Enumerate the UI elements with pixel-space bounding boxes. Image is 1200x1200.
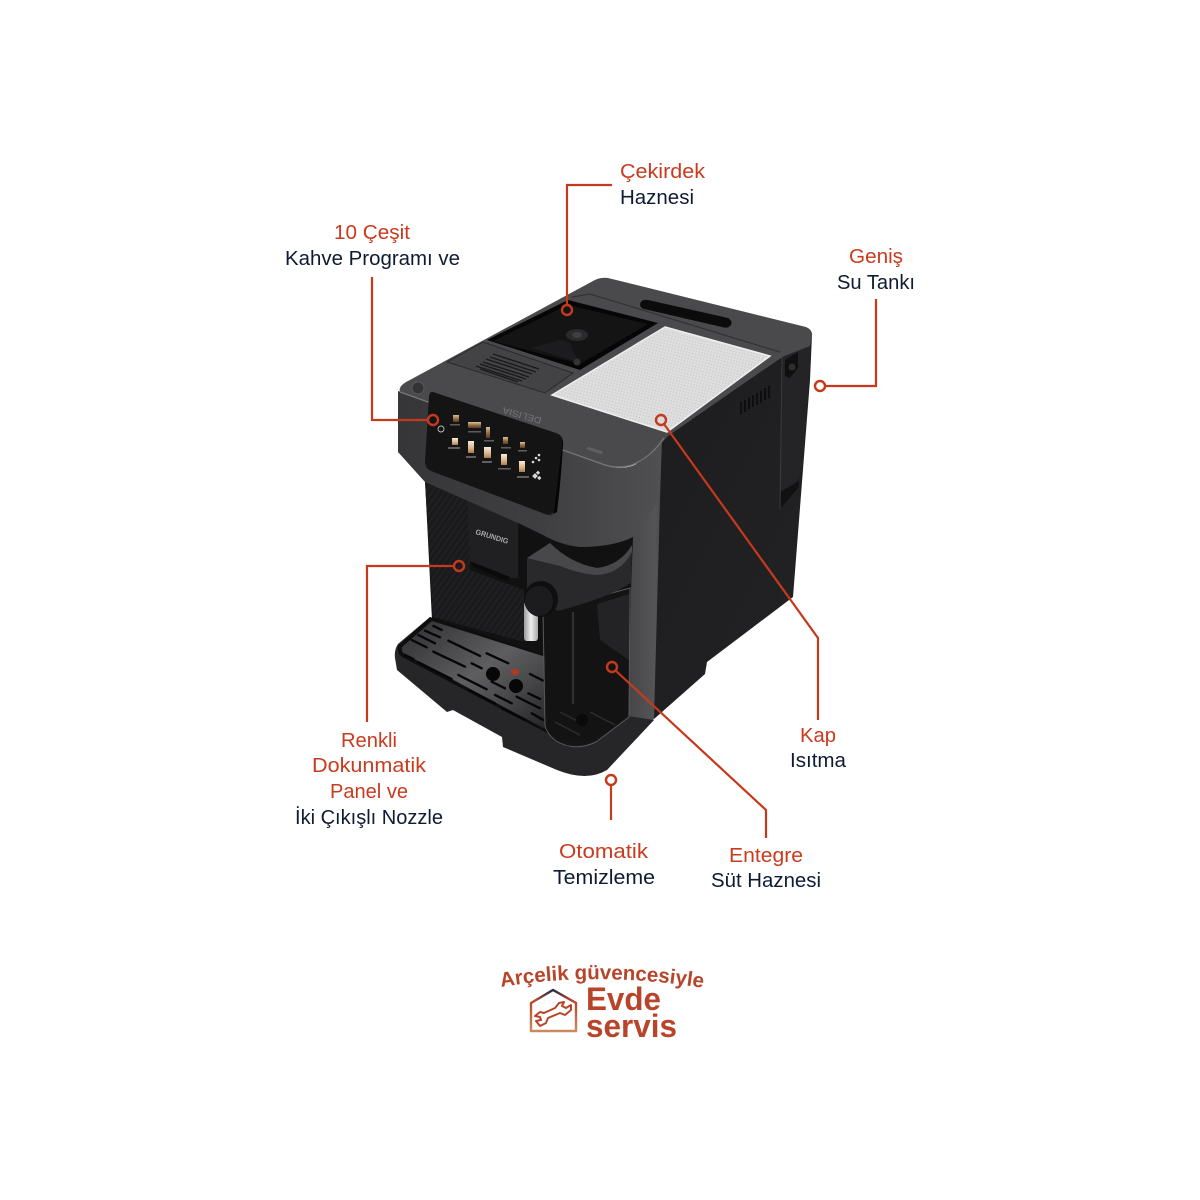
handle slot xyxy=(640,300,732,328)
label: touch panel and nozzle: İki Çıkışlı Nozzle xyxy=(295,806,443,829)
jug glass xyxy=(543,588,630,747)
jug head xyxy=(527,543,632,611)
water tank xyxy=(780,338,811,509)
badge title: servis xyxy=(586,1008,677,1044)
drain holes xyxy=(486,667,500,681)
label: water tank: Geniş xyxy=(849,246,903,268)
label: cup warming: Isıtma xyxy=(790,750,847,772)
brand name: DELISIA xyxy=(501,405,543,426)
label: milk container: Süt Haznesi xyxy=(711,870,821,892)
grate slots xyxy=(405,626,543,720)
GRUNDIG logo: GRUNDIG xyxy=(474,527,510,546)
callout: milk container xyxy=(607,662,821,892)
label: automatic cleaning: Temizleme xyxy=(553,867,655,889)
drink row 2 xyxy=(452,438,525,472)
machine side panel xyxy=(630,335,812,720)
label: water tank: Su Tankı xyxy=(837,272,915,294)
icon: house with wrench xyxy=(531,990,576,1031)
right front column xyxy=(628,440,662,745)
label: milk container: Entegre xyxy=(729,845,803,867)
top rear seam xyxy=(572,294,780,352)
grille lid xyxy=(447,342,573,393)
jug knob xyxy=(524,581,558,617)
coffee nozzle housing xyxy=(467,498,518,581)
label: coffee programs: Kahve Programı ve xyxy=(285,248,460,270)
power button xyxy=(412,382,424,394)
carbon textured wall xyxy=(425,482,524,642)
settings icons xyxy=(532,454,541,480)
badge arched heading: Arçelik güvencesiyle xyxy=(502,965,704,988)
label: coffee programs: 10 Çeşit xyxy=(334,222,410,244)
touch screen xyxy=(425,392,563,516)
callout: automatic cleaning xyxy=(553,775,655,889)
coffee machine xyxy=(395,278,812,776)
milk spout xyxy=(524,601,538,641)
bean hopper xyxy=(487,300,658,370)
label: touch panel and nozzle: Panel ve xyxy=(330,781,408,803)
label: bean hopper: Haznesi xyxy=(620,187,694,209)
top front highlight edge xyxy=(400,392,664,467)
callout: cup warming xyxy=(656,415,847,772)
tray grate xyxy=(402,621,546,729)
drink row 1 xyxy=(453,415,525,448)
panel icon xyxy=(438,426,444,432)
jug slots through glass xyxy=(555,712,615,735)
drip tray xyxy=(395,617,654,776)
label: bean hopper: Çekirdek xyxy=(620,161,706,183)
white perforated mat xyxy=(552,327,770,432)
side vents xyxy=(741,386,769,414)
label: automatic cleaning: Otomatik xyxy=(559,841,649,863)
top surface xyxy=(400,278,812,467)
label: cup warming: Kap xyxy=(800,725,836,747)
callout: bean hopper xyxy=(562,161,706,315)
lower front wall xyxy=(425,480,636,725)
milk jug xyxy=(524,543,632,747)
jug inner shade xyxy=(597,594,629,660)
badge title: Evde xyxy=(586,981,661,1017)
head front xyxy=(398,391,662,547)
callout: touch panel and nozzle xyxy=(295,561,464,829)
callout: coffee programs xyxy=(285,222,460,425)
red indicator xyxy=(511,669,519,675)
model mark xyxy=(587,447,603,454)
label: touch panel and nozzle: Dokunmatik xyxy=(312,755,427,777)
label: touch panel and nozzle: Renkli xyxy=(341,730,397,752)
drink captions xyxy=(448,424,529,478)
badge: home service xyxy=(502,965,704,1044)
callout: water tank xyxy=(815,246,915,391)
